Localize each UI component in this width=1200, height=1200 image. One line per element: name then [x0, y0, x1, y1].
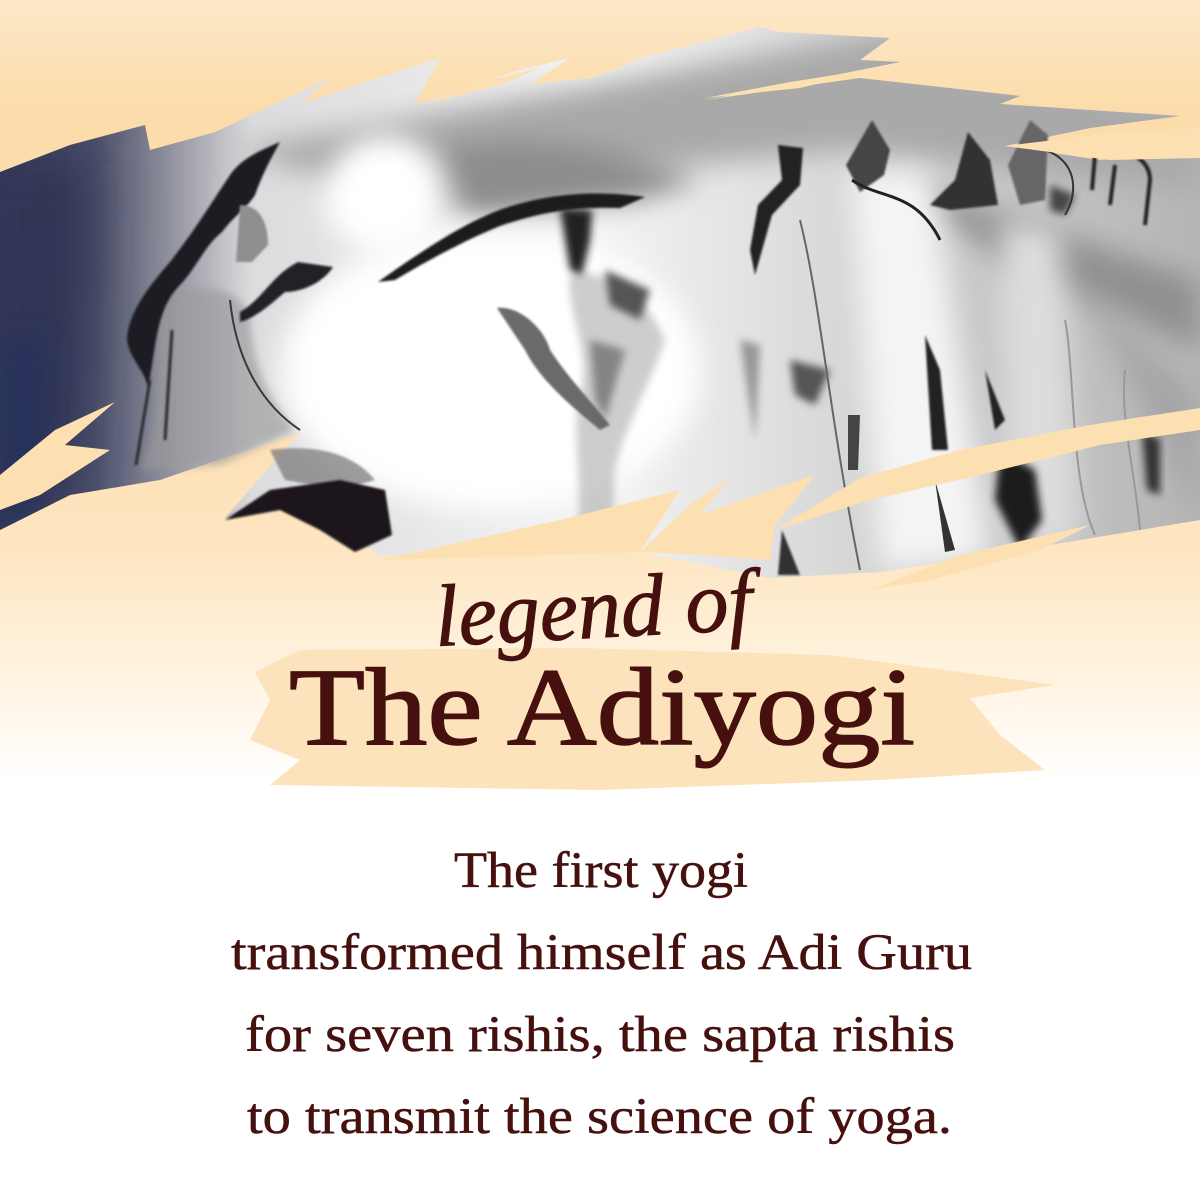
line 3: for seven rishis, the sapta rishis [245, 1007, 955, 1063]
rishi dark marks [605, 270, 650, 320]
rishi six [1008, 120, 1048, 205]
rishi raised hands [497, 308, 610, 430]
Adiyogi arm and hand [240, 262, 333, 322]
line 4: to transmit the science of yoga. [247, 1089, 952, 1145]
line 1: The first yogi [454, 843, 748, 899]
peach brush streaks over the wash [0, 60, 1200, 590]
Adiyogi hair and head [127, 142, 280, 388]
title brush stroke [250, 648, 1055, 790]
rishi three [750, 145, 803, 275]
figure: Adiyogi [127, 142, 392, 552]
script heading: legend of [432, 552, 765, 666]
rishi body [569, 273, 665, 545]
rishi hair [560, 208, 592, 275]
Adiyogi leg [270, 448, 375, 490]
Adiyogi torso [140, 288, 295, 470]
rishi five [930, 132, 998, 210]
rishi four [846, 120, 890, 192]
line 2: transformed himself as Adi Guru [231, 925, 972, 981]
figure: kneeling rishi [497, 208, 665, 545]
ink cloud [378, 194, 645, 282]
ink wash brush panel [0, 0, 1200, 600]
rishi seven [1092, 151, 1150, 225]
figures: standing rishis [740, 120, 1160, 575]
body text [231, 843, 972, 1145]
main title: The Adiyogi [289, 646, 915, 768]
